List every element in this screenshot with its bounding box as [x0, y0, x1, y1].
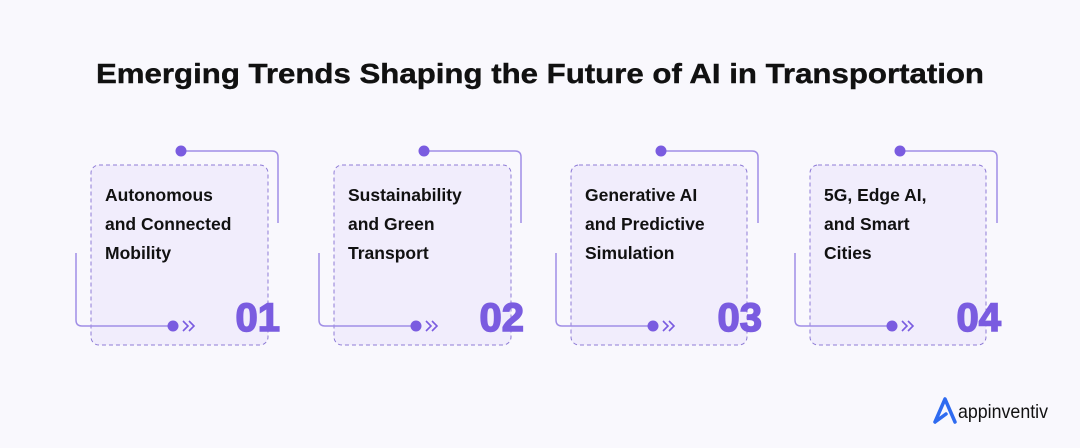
- card 3: Generative AI and Predictive Simulation: and Predictive: [585, 214, 705, 234]
- card 1: Autonomous and Connected Mobility: 01: [236, 296, 280, 340]
- card 2: Sustainability and Green Transport: [319, 146, 524, 345]
- card 4: 5G, Edge AI, and Smart Cities: Cities: [824, 243, 872, 263]
- card 3: Generative AI and Predictive Simulation: Generative AI: [585, 185, 697, 205]
- card 4: 5G, Edge AI, and Smart Cities: and Smart: [824, 214, 910, 234]
- card 2: Sustainability and Green Transport: Transport: [348, 243, 429, 263]
- card 3: Generative AI and Predictive Simulation: Simulation: [585, 243, 674, 263]
- logo: appinventiv: appinventiv: [958, 401, 1048, 423]
- card 2: Sustainability and Green Transport: Sustainability: [348, 185, 462, 205]
- title: Emerging Trends Shaping the Future of AI in Transportation: [96, 58, 984, 89]
- card 1: Autonomous and Connected Mobility: Autonomous: [105, 185, 213, 205]
- card 4: 5G, Edge AI, and Smart Cities: [795, 146, 1002, 345]
- card 4: 5G, Edge AI, and Smart Cities: 04: [956, 296, 1002, 340]
- card 2: Sustainability and Green Transport: 02: [480, 296, 524, 340]
- card 4: 5G, Edge AI, and Smart Cities: 5G, Edge AI,: [824, 185, 926, 205]
- card 1: Autonomous and Connected Mobility: and Connected: [105, 214, 231, 234]
- card 2: Sustainability and Green Transport: and Green: [348, 214, 435, 234]
- card 3: Generative AI and Predictive Simulation: 03: [718, 296, 762, 340]
- card 1: Autonomous and Connected Mobility: Mobility: [105, 243, 171, 263]
- card 1: Autonomous and Connected Mobility: [76, 146, 280, 345]
- logo: appinventiv: [935, 399, 1048, 423]
- card 3: Generative AI and Predictive Simulation: [556, 146, 762, 345]
